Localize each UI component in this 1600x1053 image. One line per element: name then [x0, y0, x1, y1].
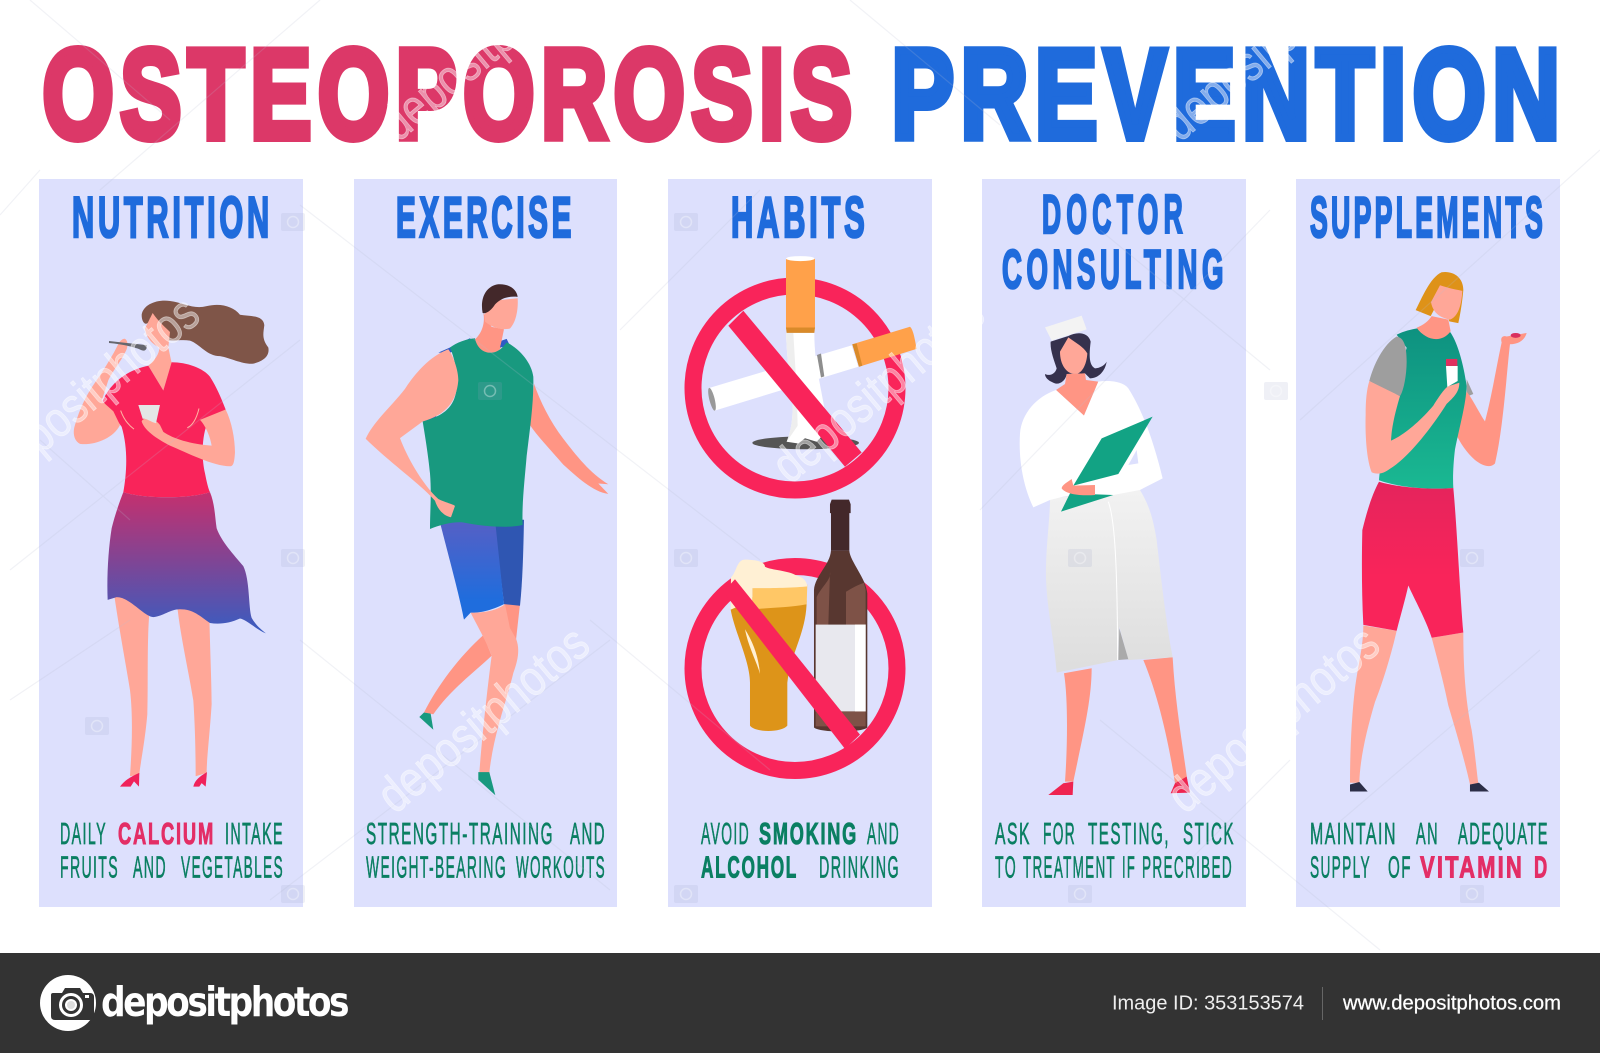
- caption: supplements: SUPPLY: [1310, 850, 1371, 884]
- caption: nutrition: CALCIUM: [118, 816, 215, 851]
- watermark overlay: depositphotos: [761, 285, 995, 493]
- caption: doctor consulting: TO: [995, 850, 1017, 884]
- panel: supplements: [1296, 179, 1560, 907]
- caption: nutrition: AND: [133, 850, 167, 884]
- caption: supplements: AN: [1416, 816, 1439, 851]
- caption: supplements: D: [1534, 850, 1549, 884]
- watermark overlay: depositphotos: [1156, 615, 1390, 823]
- caption: nutrition: DAILY: [60, 816, 107, 851]
- title: OSTEOPOROSIS: [42, 23, 858, 165]
- caption: supplements: [1310, 816, 1549, 884]
- caption: doctor consulting: FOR: [1043, 816, 1076, 851]
- caption: doctor consulting: TREATMENT: [1023, 850, 1116, 884]
- caption: nutrition: FRUITS: [60, 850, 119, 884]
- heading: habits: HABITS: [731, 186, 868, 250]
- caption: habits: [701, 816, 900, 884]
- figure: woman taking pills: [1350, 272, 1527, 791]
- panel: doctor consulting: [982, 179, 1246, 907]
- heading: exercise: EXERCISE: [396, 186, 575, 250]
- caption: habits: SMOKING: [759, 816, 858, 851]
- heading: nutrition: NUTRITION: [72, 186, 273, 250]
- panel: habits: AND: [867, 816, 900, 851]
- caption: exercise: STRENGTH-TRAINING: [366, 816, 554, 851]
- image id: Image ID: 353153574: [1112, 992, 1304, 1014]
- footer bar: [0, 953, 1600, 1053]
- heading: doctor consulting: DOCTOR: [1042, 184, 1188, 245]
- caption: nutrition: [60, 816, 284, 884]
- figure: nurse with clipboard: [1020, 316, 1190, 795]
- text: WORKOUTS: [516, 850, 606, 884]
- logo wordmark: depositphotos: [101, 978, 348, 1026]
- heading: doctor consulting: CONSULTING: [1002, 239, 1228, 300]
- panel: doctor consulting: STICK: [1183, 816, 1235, 851]
- caption: habits: AVOID: [701, 816, 750, 851]
- panel: habits: DRINKING: [819, 850, 900, 884]
- caption: doctor consulting: IF: [1122, 850, 1136, 884]
- figure: woman eating with spoon: [74, 301, 269, 787]
- caption: habits: ALCOHOL: [701, 850, 798, 884]
- panel: doctor consulting: PRECRIBED: [1142, 850, 1233, 884]
- caption: doctor consulting: ASK: [995, 816, 1031, 851]
- caption: doctor consulting: TESTING,: [1088, 816, 1170, 851]
- caption: exercise: WEIGHT-BEARING: [366, 850, 507, 884]
- caption: doctor consulting: [995, 816, 1235, 884]
- caption: exercise: [366, 816, 606, 884]
- panel: exercise: AND: [570, 816, 606, 851]
- panel: habits: [668, 179, 932, 907]
- icon: no smoking: [693, 256, 917, 490]
- caption: supplements: VITAMIN: [1420, 850, 1524, 884]
- icon: no alcohol: [693, 500, 897, 770]
- logo: depositphotos camera: [40, 975, 96, 1031]
- caption: supplements: MAINTAIN: [1310, 816, 1397, 851]
- panel: nutrition: [39, 179, 303, 907]
- figure: man exercising: [366, 284, 608, 795]
- heading: doctor consulting: [1002, 184, 1228, 300]
- caption: supplements: OF: [1388, 850, 1412, 884]
- panel: nutrition: VEGETABLES: [181, 850, 284, 884]
- panel: nutrition: INTAKE: [225, 816, 284, 851]
- panel: exercise: [354, 179, 617, 907]
- website url: www.depositphotos.com: [1342, 992, 1561, 1014]
- watermark overlay: depositphotos: [366, 615, 600, 823]
